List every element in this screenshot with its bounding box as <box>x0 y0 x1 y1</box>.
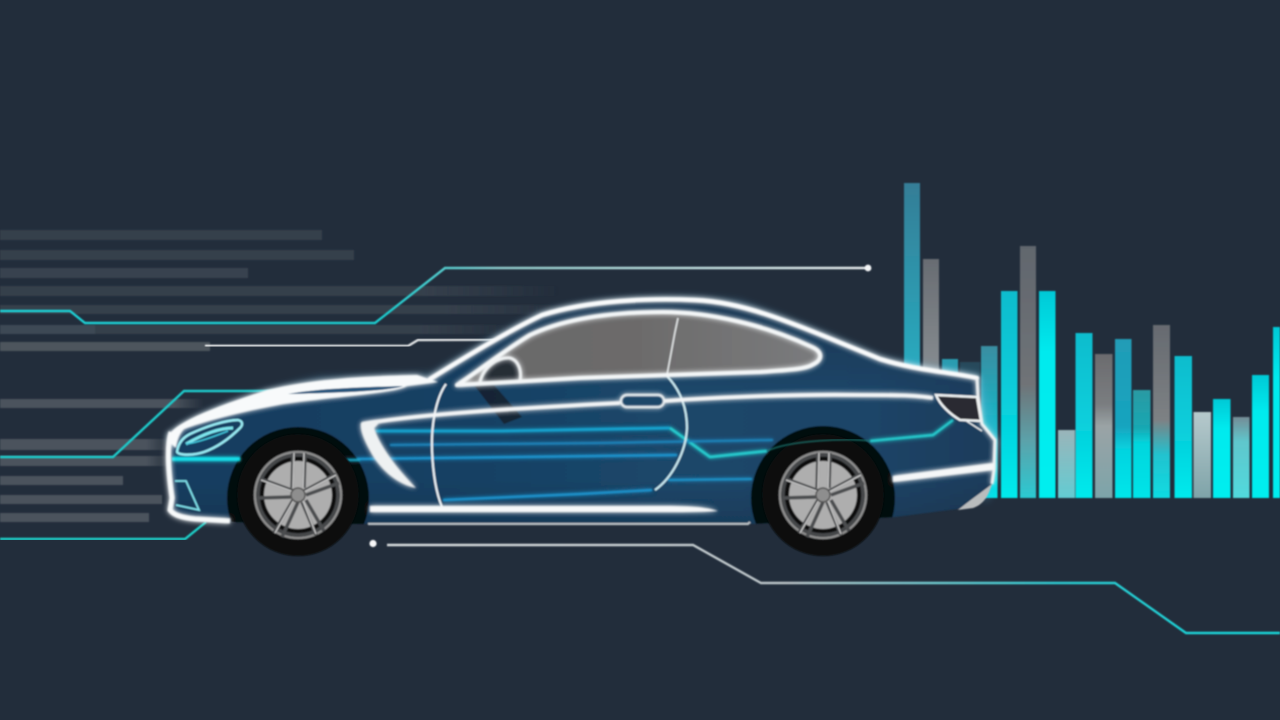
bar chart <box>904 183 1280 498</box>
sill line <box>370 506 718 512</box>
front wheel <box>237 434 359 556</box>
white car line work <box>167 299 995 521</box>
speed streaks: lower left <box>0 399 204 522</box>
rear wheel <box>762 434 884 556</box>
wheel arches <box>226 426 896 525</box>
belt line <box>362 395 933 424</box>
circuit line: front upper <box>0 391 290 457</box>
rear bumper stripe <box>893 463 993 482</box>
lower sill line <box>368 522 750 524</box>
fender vent <box>361 420 416 488</box>
headlight <box>177 420 242 455</box>
mirror outline <box>480 358 521 382</box>
side mirror <box>480 358 521 382</box>
circuit line: top with end dot <box>0 265 871 323</box>
mirror shadow <box>474 385 522 424</box>
body shading <box>168 300 995 524</box>
car data infographic illustration <box>0 182 1280 636</box>
fog light <box>175 481 199 510</box>
side window <box>457 312 820 385</box>
car <box>161 292 1001 528</box>
speed streaks: upper left <box>0 230 590 351</box>
rear wheel spokes <box>783 453 864 537</box>
data traces on body <box>172 420 953 500</box>
rear quarter crease <box>965 420 982 431</box>
circuit line: bottom with start dot <box>369 540 1280 633</box>
tail light <box>936 395 981 421</box>
rear diffuser highlight <box>958 484 992 510</box>
hood highlight <box>167 375 438 448</box>
car body <box>168 300 995 524</box>
door handle <box>621 395 664 407</box>
front bumper outline <box>168 432 230 521</box>
window post line <box>667 318 678 375</box>
car glow <box>168 301 995 500</box>
window outline <box>457 312 820 385</box>
white data line through streaks and window <box>205 339 713 346</box>
hood gap <box>288 386 403 394</box>
door lines <box>432 376 687 507</box>
faint trace over rear tyre <box>767 440 870 451</box>
roof line <box>430 299 977 379</box>
front wheel spokes <box>258 453 339 537</box>
circuit line: front lower <box>0 522 206 539</box>
rear outline <box>977 378 995 484</box>
